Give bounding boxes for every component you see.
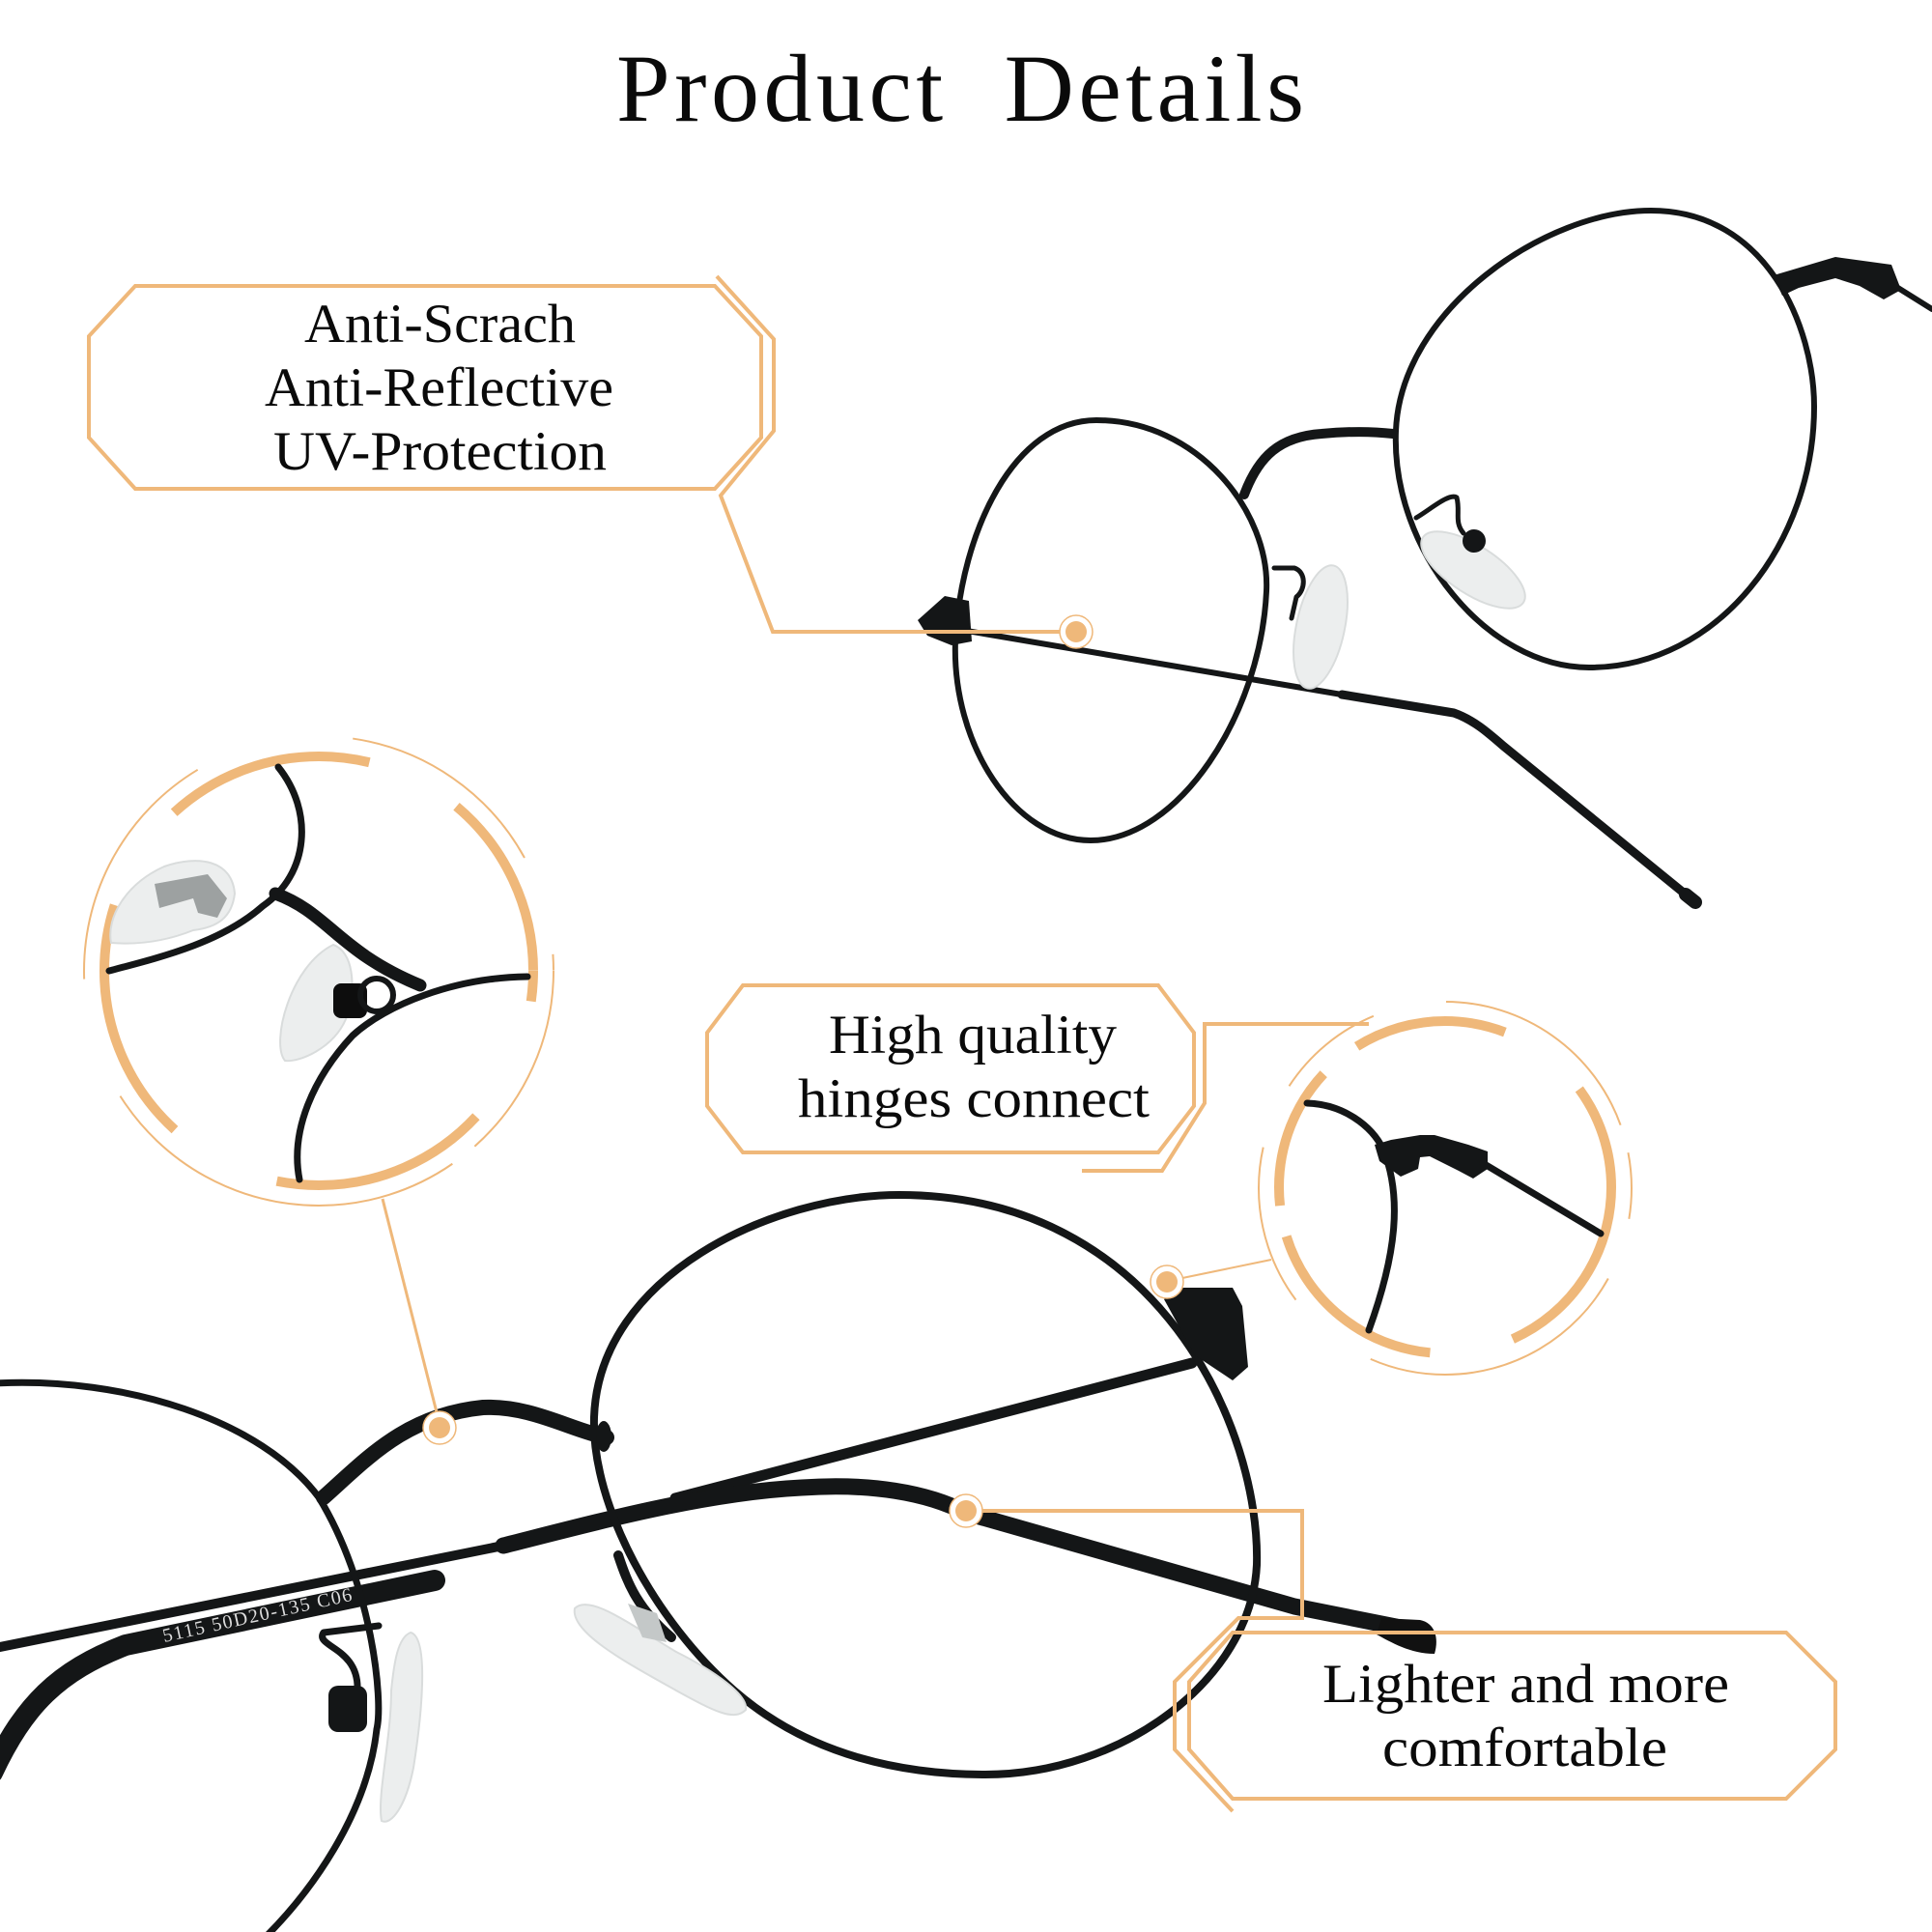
outer frame stroke and leader — [717, 276, 1063, 632]
callout text: UV-Protection — [273, 421, 607, 482]
lens rim — [1307, 1103, 1394, 1330]
nose pad lower — [280, 945, 352, 1061]
temple sleeve — [1342, 695, 1690, 898]
outer frame stroke and leader — [1082, 1024, 1369, 1171]
callout: lens features — [89, 276, 1093, 648]
callout text: comfortable — [1382, 1718, 1667, 1778]
marker dot — [1151, 1265, 1183, 1298]
callout text: Anti-Scrach — [304, 294, 576, 355]
photo: bottom glasses — [0, 1195, 1436, 1932]
temple tip — [1686, 895, 1695, 902]
right nose pad — [1409, 517, 1537, 623]
temple marking: 5115 50D20-135 C06 — [160, 1584, 354, 1647]
callout frame — [89, 286, 761, 489]
leader to hinge — [1182, 1260, 1271, 1278]
center nose pad arm — [618, 1555, 671, 1637]
callout text: High quality — [829, 1005, 1118, 1065]
left hinge — [918, 596, 972, 645]
front temple sleeve — [503, 1487, 1396, 1627]
marker dot — [423, 1411, 456, 1444]
callout text — [1322, 1654, 1729, 1778]
thin segmented ring — [1259, 1002, 1632, 1375]
magnifier: hinge detail — [1259, 1002, 1632, 1375]
thick segmented ring — [1279, 1021, 1611, 1353]
right temple stub — [1893, 285, 1932, 309]
hinge body — [1375, 1135, 1488, 1179]
callout: lightness — [950, 1494, 1835, 1811]
temple arm — [955, 629, 1342, 695]
front temple thin — [0, 1546, 503, 1647]
callout frame — [707, 985, 1194, 1152]
pad imprint — [155, 874, 227, 918]
hinge — [1164, 1288, 1248, 1380]
bridge — [1244, 432, 1393, 495]
large lens rim — [594, 1195, 1257, 1775]
nose pad upper — [110, 861, 235, 944]
bridge — [275, 894, 420, 985]
lower left temple sleeve — [0, 1580, 435, 1773]
temple tip — [1377, 1618, 1436, 1654]
bridge — [324, 1407, 607, 1497]
leader line — [383, 1199, 437, 1412]
left nose pad arm — [1274, 568, 1303, 618]
title: Product Details — [616, 35, 1304, 142]
thin segmented ring — [84, 736, 554, 1206]
callout text: hinges connect — [798, 1068, 1150, 1129]
temple — [1483, 1163, 1601, 1234]
marker dot — [950, 1494, 982, 1527]
left lens rim — [0, 1382, 379, 1932]
left nose pad arm — [323, 1626, 379, 1690]
bridge joint — [596, 1421, 611, 1452]
magnifier: bridge detail — [84, 736, 554, 1206]
callout: bridge leader — [383, 1199, 456, 1444]
callout text — [798, 1005, 1150, 1129]
nose pad loop — [360, 979, 393, 1011]
nose pad screw block — [333, 983, 367, 1018]
center nose pad detail — [628, 1604, 667, 1642]
left nose clip — [328, 1686, 367, 1732]
left lens rim — [955, 420, 1266, 840]
outer frame stroke and leader — [980, 1511, 1302, 1811]
lens rim right — [298, 977, 527, 1179]
callout text: Anti-Reflective — [265, 357, 613, 418]
left nose pad — [1284, 560, 1357, 694]
center nose pad — [575, 1605, 746, 1715]
right lens rim — [1396, 211, 1814, 668]
right nose pad arm — [1416, 497, 1463, 533]
marker dot — [1060, 615, 1093, 648]
back temple arm — [675, 1363, 1192, 1498]
left nose pad — [381, 1633, 422, 1822]
callout text — [265, 294, 613, 482]
photo: top glasses — [918, 211, 1932, 902]
right hinge — [1774, 257, 1901, 299]
callout: hinges — [707, 985, 1369, 1298]
lens rim left — [109, 767, 301, 971]
callout text: Lighter and more — [1322, 1654, 1729, 1715]
thick segmented ring — [104, 756, 533, 1185]
right nose pad clip — [1463, 529, 1486, 553]
callout frame — [1189, 1633, 1835, 1799]
